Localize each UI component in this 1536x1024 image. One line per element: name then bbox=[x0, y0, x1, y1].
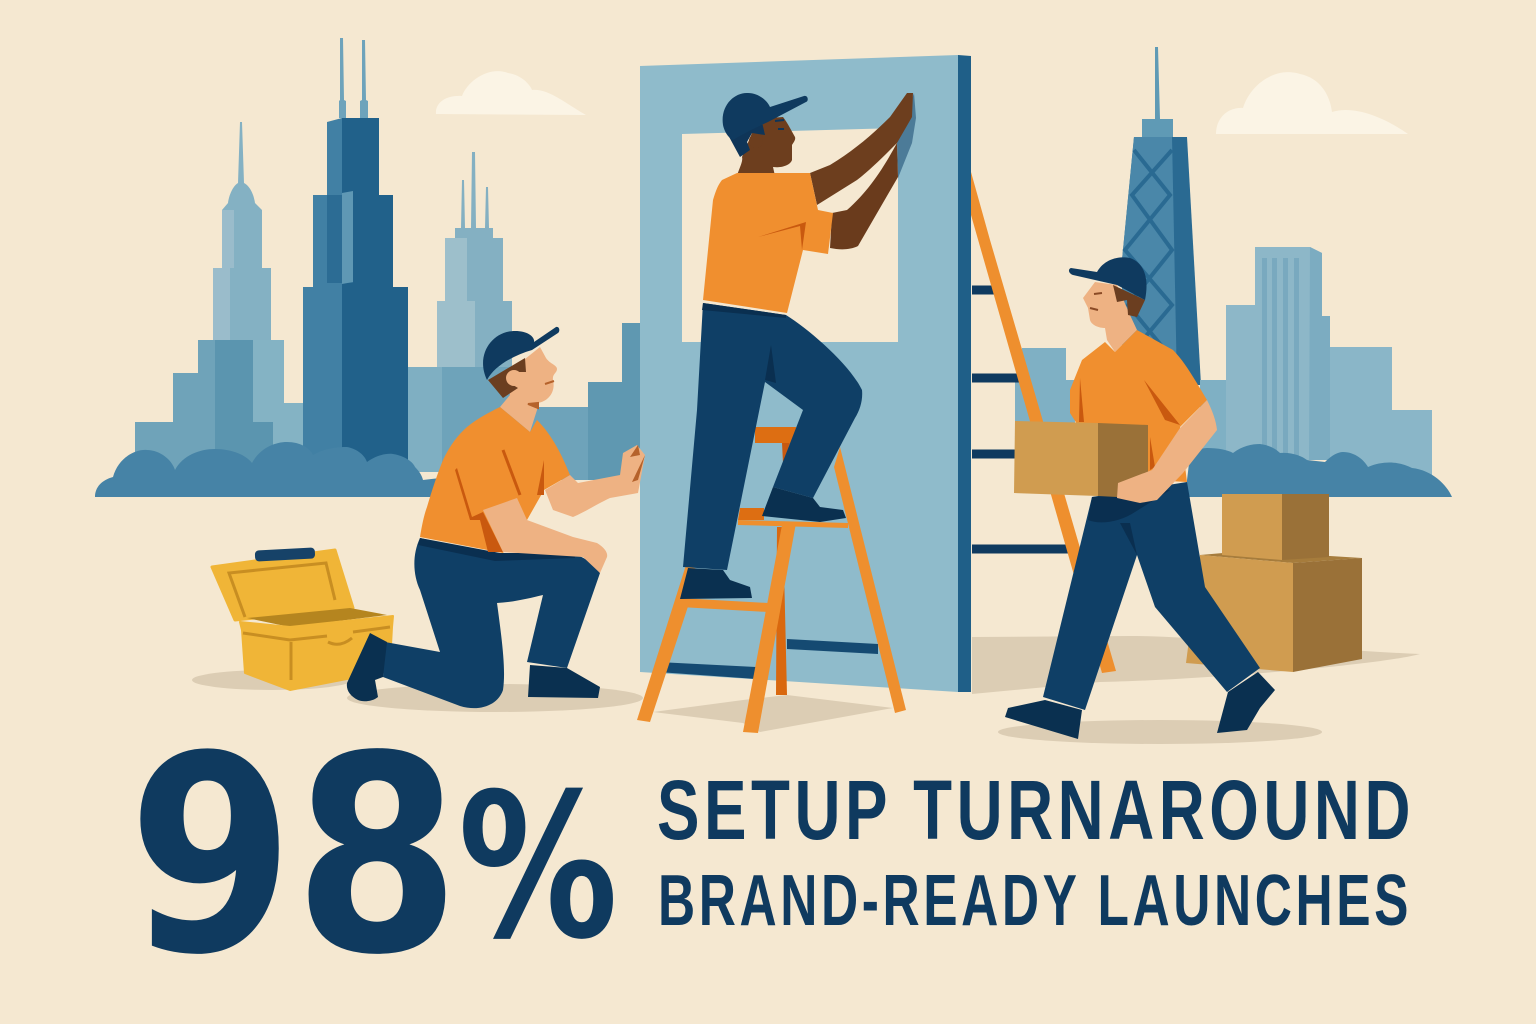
worker: climbing man bbox=[680, 93, 916, 599]
pants bbox=[683, 303, 862, 570]
stacked boxes bbox=[1186, 494, 1362, 672]
skyline left bbox=[135, 122, 640, 480]
shoes bbox=[347, 633, 600, 701]
shirt folds bbox=[455, 460, 544, 552]
cap bbox=[483, 327, 559, 380]
willis tower bbox=[303, 38, 408, 462]
big stat: % bbox=[458, 751, 618, 984]
skyline right bbox=[1015, 247, 1432, 475]
bushes right bbox=[1185, 444, 1452, 497]
bushes left bbox=[95, 442, 440, 497]
ground shadows bbox=[192, 636, 1420, 744]
hair bbox=[1113, 285, 1145, 317]
head and neck bbox=[1083, 282, 1137, 352]
cap bbox=[723, 93, 808, 140]
shoes bbox=[1005, 672, 1275, 739]
rear arm bbox=[830, 143, 898, 249]
worker: kneeling man bbox=[347, 327, 645, 708]
john hancock tower bbox=[1122, 47, 1201, 385]
cloud right bbox=[1216, 72, 1408, 134]
carried box bbox=[1014, 421, 1148, 497]
ear bbox=[749, 134, 763, 148]
worker: carrying man bbox=[1005, 257, 1362, 739]
pants bbox=[1043, 482, 1260, 710]
window opening bbox=[682, 128, 898, 342]
shoes bbox=[680, 487, 846, 599]
cloud left bbox=[436, 71, 586, 115]
front arm bbox=[810, 93, 913, 205]
shirt bbox=[1070, 330, 1207, 482]
shirt bbox=[703, 173, 833, 313]
shirt bbox=[420, 407, 570, 553]
held panel bbox=[897, 93, 916, 178]
step ladder bbox=[637, 427, 906, 733]
eye and mouth bbox=[1090, 293, 1102, 310]
ear bbox=[506, 370, 522, 386]
neck and face bbox=[737, 117, 795, 176]
neck and face bbox=[500, 347, 557, 432]
mouth bbox=[528, 381, 554, 408]
big stat: 98 bbox=[128, 699, 460, 1015]
arm bbox=[1117, 400, 1217, 503]
cap bbox=[1069, 257, 1147, 300]
fingers bbox=[630, 445, 645, 482]
ladder behind wall bbox=[971, 172, 1116, 673]
wall panel bbox=[640, 55, 971, 692]
arm on knee bbox=[483, 498, 607, 573]
eye bbox=[775, 120, 784, 129]
toolbox bbox=[212, 547, 393, 690]
raised arm bbox=[545, 445, 645, 517]
hair bbox=[727, 122, 765, 157]
pants bbox=[383, 538, 600, 708]
hair bbox=[488, 358, 526, 398]
